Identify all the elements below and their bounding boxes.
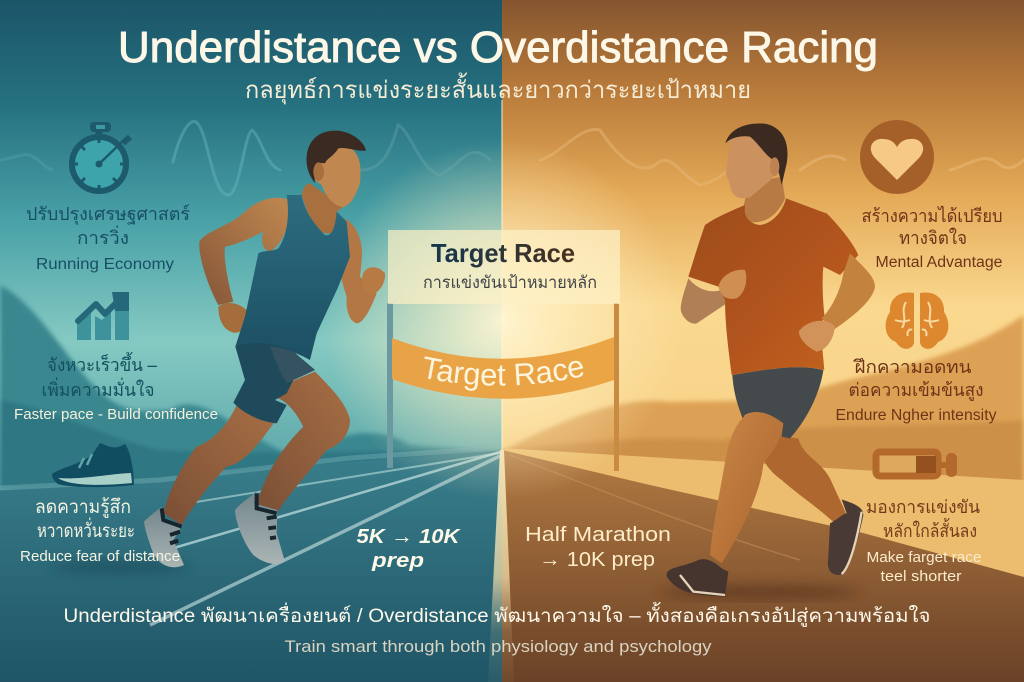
left runner bbox=[144, 131, 385, 567]
rear fist bbox=[718, 270, 746, 299]
text: running economy: Running Economy bbox=[36, 256, 174, 273]
front leg bbox=[710, 412, 783, 563]
shoe collars and laces bbox=[162, 493, 277, 543]
subtitle: กลยุทธ์การแข่งระยะสั้นและยาวกว่าระยะเป้าหมาย bbox=[245, 72, 751, 105]
text: mental advantage: สร้างความได้เปรียบ bbox=[862, 205, 1002, 226]
text: reduce fear: Reduce fear of distance bbox=[20, 549, 180, 565]
centre light strip bbox=[488, 450, 514, 682]
tank top bbox=[235, 195, 350, 360]
text: reduce fear: หวาดหวั่นระยะ bbox=[37, 517, 135, 542]
text: mental advantage: ทางจิตใจ bbox=[899, 227, 967, 248]
front leg bbox=[256, 372, 350, 513]
left track bbox=[0, 448, 502, 682]
neck bbox=[743, 177, 785, 222]
ribbon text: Target Race bbox=[424, 356, 584, 391]
pulse wave lines bbox=[0, 122, 1024, 195]
banner: target race sign bbox=[387, 230, 620, 471]
text: reduce fear bbox=[20, 497, 180, 565]
hair bbox=[725, 123, 787, 185]
right runner bbox=[667, 123, 875, 597]
label: 5K to 10K prep: 5K → 10K bbox=[356, 526, 461, 548]
text: make target race feel shorter: Make farget race bbox=[866, 549, 982, 566]
shoe soles bbox=[680, 512, 862, 595]
label: 5K to 10K prep: prep bbox=[371, 550, 424, 572]
sign heading: Target Race bbox=[431, 238, 575, 268]
label: half marathon to 10K prep bbox=[525, 524, 671, 571]
text: running economy bbox=[26, 204, 190, 273]
text: endure higher intensity: ต่อความเข้มข้นสูง bbox=[848, 380, 984, 401]
icon: rising chart bbox=[77, 292, 129, 340]
title: Underdistance vs Overdistance Racing bbox=[118, 23, 878, 72]
front fist bbox=[362, 267, 385, 295]
shorts bbox=[233, 343, 315, 423]
centre glow bbox=[322, 140, 682, 500]
text: running economy: ปรับปรุงเศรษฐศาสตร์ bbox=[26, 204, 190, 225]
text: endure higher intensity bbox=[836, 357, 997, 424]
sign poles bbox=[387, 303, 619, 471]
back leg bbox=[763, 425, 847, 523]
back shoe bbox=[144, 506, 184, 567]
head bbox=[311, 143, 361, 207]
icon: stopwatch bbox=[72, 122, 130, 191]
text: mental advantage bbox=[862, 205, 1002, 271]
front shoe bbox=[667, 559, 728, 597]
ear bbox=[313, 162, 324, 181]
text: faster pace: เพิ่มความมั่นใจ bbox=[42, 377, 154, 400]
label: half marathon to 10K prep: → 10K prep bbox=[539, 549, 655, 571]
background: left teal half bbox=[0, 0, 502, 682]
text: make target race feel shorter bbox=[866, 497, 982, 585]
text: endure higher intensity: Endure Ngher intensity bbox=[836, 407, 997, 424]
front shoe bbox=[235, 491, 285, 564]
text: faster pace bbox=[14, 352, 218, 423]
neck bbox=[302, 183, 343, 234]
left hazy mountains bbox=[0, 285, 500, 490]
ribbon bbox=[392, 337, 614, 399]
text: faster pace: จังหวะเร็วขึ้น – bbox=[47, 352, 157, 375]
text: faster pace: Faster pace - Build confidence bbox=[14, 407, 218, 423]
hair bbox=[307, 131, 366, 183]
rear arm bbox=[681, 278, 727, 324]
icon: heart badge bbox=[860, 120, 934, 194]
text: make target race feel shorter: หลักใกล้สั้นลง bbox=[883, 518, 977, 541]
back fist bbox=[218, 303, 253, 333]
text: endure higher intensity: ฝึกความอดทน bbox=[853, 357, 972, 377]
back leg bbox=[163, 405, 275, 525]
label: 5K to 10K prep bbox=[356, 526, 461, 572]
front fist bbox=[799, 321, 835, 352]
icon: battery bbox=[876, 452, 957, 477]
back arm bbox=[199, 198, 290, 305]
ear bbox=[770, 157, 779, 176]
right hazy mountains bbox=[505, 315, 1024, 500]
sign board bbox=[388, 230, 620, 304]
icon: running shoe bbox=[52, 443, 134, 487]
bottom subtitle: Train smart through both physiology and psychology bbox=[284, 637, 712, 656]
label: half marathon to 10K prep: Half Marathon bbox=[525, 524, 671, 546]
bottom caption: Underdistance พัฒนาเครื่องยนต์ / Overdistance พัฒนาความใจ – ทั้งสองคือเกรงอัปสู่ความพร้อมใจ bbox=[64, 602, 930, 627]
text: reduce fear: ลดความรู้สึก bbox=[35, 497, 131, 518]
front arm bbox=[822, 253, 875, 330]
shorts bbox=[732, 367, 823, 438]
panel: left benefits bbox=[14, 122, 218, 565]
front arm bbox=[341, 218, 377, 323]
foot shadows bbox=[50, 560, 860, 599]
text: mental advantage: Mental Advantage bbox=[876, 254, 1002, 271]
shirt bbox=[688, 198, 858, 375]
background: right amber half bbox=[502, 0, 1024, 682]
back shoe bbox=[828, 499, 863, 575]
text: running economy: การวิ่ง bbox=[77, 225, 129, 248]
text: make target race feel shorter: มองการแข่งขัน bbox=[866, 497, 980, 517]
text: make target race feel shorter: teel shorter bbox=[880, 568, 962, 585]
right road bbox=[502, 448, 1024, 682]
icon: brain bbox=[886, 292, 948, 349]
head bbox=[726, 136, 779, 198]
sign thai text: การแข่งขันเป้าหมายหลัก bbox=[423, 273, 597, 292]
panel: right benefits bbox=[836, 120, 1002, 585]
bottom caption bbox=[64, 602, 930, 656]
